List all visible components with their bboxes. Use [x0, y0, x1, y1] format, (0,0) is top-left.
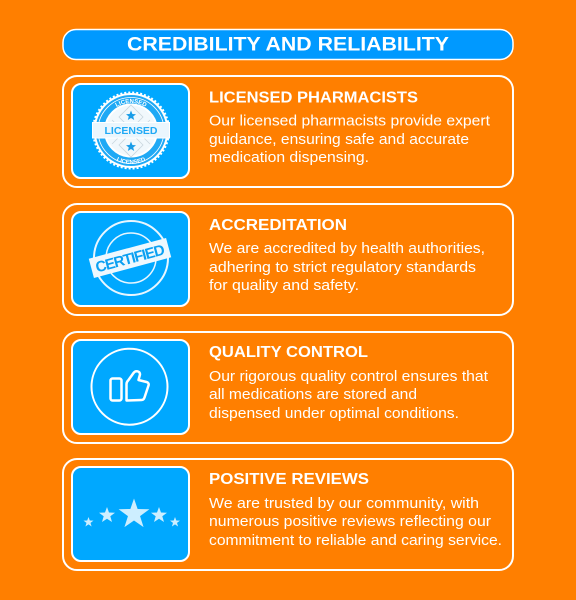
description: adhering to strict regulatory standards [209, 259, 476, 276]
description [209, 113, 491, 166]
panel: accreditation [63, 204, 513, 315]
icon: licensed seal [71, 83, 190, 179]
description: We are accredited by health authorities, [209, 240, 485, 257]
heading: LICENSED PHARMACISTS [209, 90, 418, 107]
description: Our licensed pharmacists provide expert [209, 113, 491, 130]
icon: thumbs up [72, 340, 189, 434]
heading: QUALITY CONTROL [209, 344, 368, 361]
icon: five stars [72, 467, 189, 561]
description [209, 240, 485, 294]
description: numerous positive reviews reflecting our [209, 513, 491, 530]
panel: quality control [63, 332, 513, 443]
heading: POSITIVE REVIEWS [209, 471, 369, 488]
title banner: CREDIBILITY AND RELIABILITY [127, 34, 449, 56]
icon: licensed seal: LICENSED [115, 98, 146, 107]
description: guidance, ensuring safe and accurate [209, 131, 469, 148]
description: dispensed under optimal conditions. [209, 405, 459, 422]
description [209, 368, 489, 422]
panel: positive reviews [63, 459, 513, 570]
description: We are trusted by our community, with [209, 495, 479, 512]
description: commitment to reliable and caring service. [209, 532, 502, 549]
description: Our rigorous quality control ensures that [209, 368, 489, 385]
heading: ACCREDITATION [209, 217, 347, 234]
description: for quality and safety. [209, 277, 359, 294]
description: medication dispensing. [209, 149, 369, 166]
icon: licensed seal: LICENSED [104, 125, 158, 137]
title banner [63, 30, 513, 60]
icon: certified stamp [72, 212, 189, 306]
description: all medications are stored and [209, 386, 417, 403]
panel: licensed pharmacists [62, 75, 514, 188]
description [209, 495, 502, 549]
icon: licensed seal: LICENSED [116, 157, 145, 164]
icon: certified stamp: CERTIFIED [94, 242, 167, 276]
